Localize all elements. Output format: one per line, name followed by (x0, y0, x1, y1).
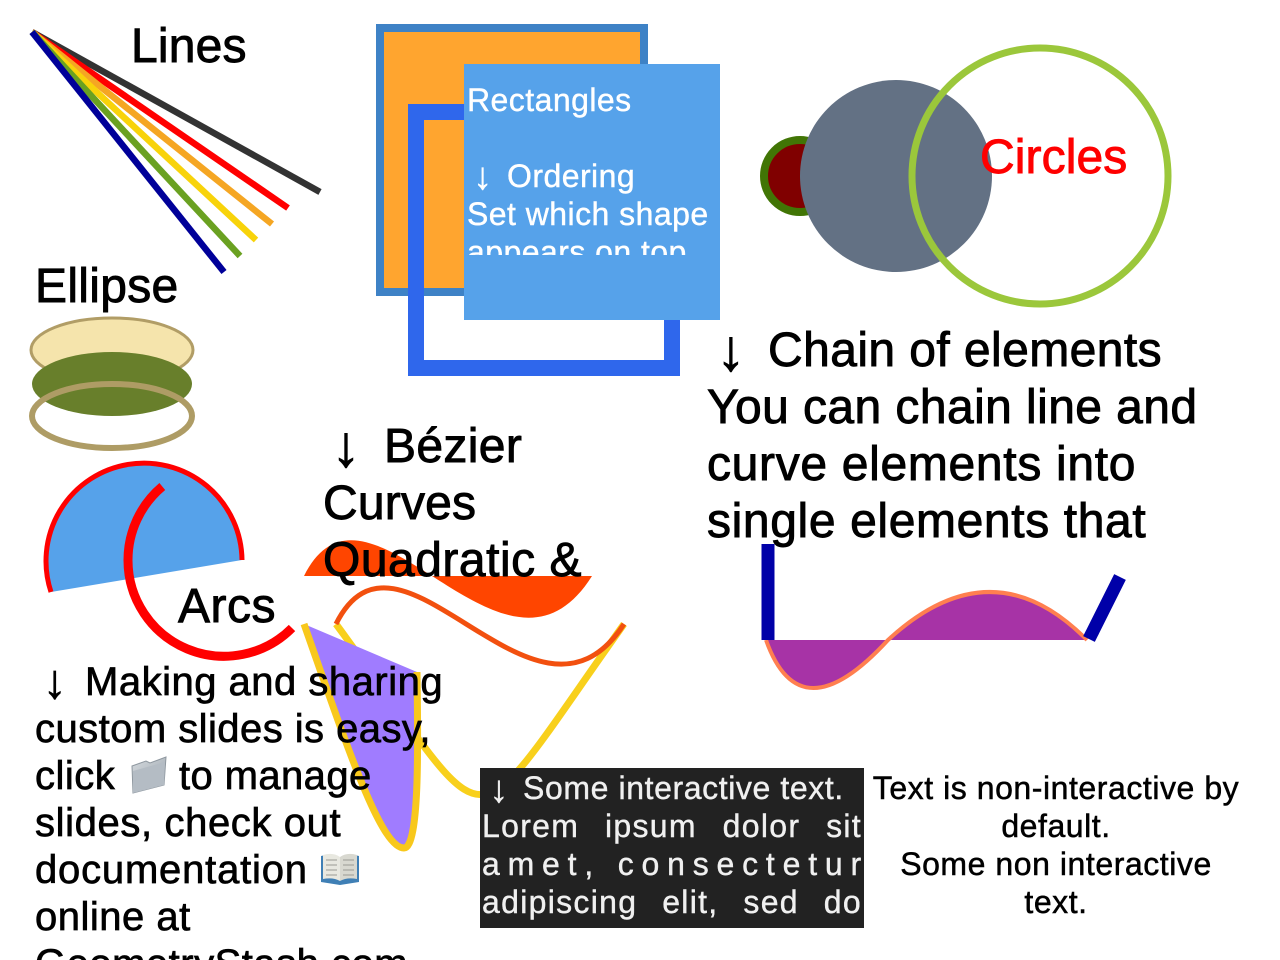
panel: chain of elements path (766, 544, 1120, 688)
text block: rectangles ordering: Ordering (507, 158, 635, 194)
text block: chain of elements: ↓ (716, 318, 746, 383)
panel: interactive text box: amet, consectetur (482, 846, 869, 882)
panel: ellipses (31, 318, 193, 448)
text block: bezier curves: Curves (323, 477, 476, 530)
text block: non-interactive text: default. (1001, 808, 1111, 844)
panel: interactive text box: ↓ (490, 769, 508, 811)
text block: making and sharing: to manage (179, 754, 372, 798)
text block: making and sharing (35, 656, 443, 960)
text block: rectangles ordering: Rectangles (467, 82, 632, 118)
text block: chain of elements: curve elements into (707, 438, 1136, 491)
text block: rectangles ordering: ↓ (473, 156, 493, 198)
text block: making and sharing: click (35, 754, 116, 798)
text block: making and sharing: ↓ (43, 656, 67, 709)
panel: lines fan (32, 32, 320, 272)
text block: chain of elements (707, 318, 1198, 548)
panel: interactive text box: Lorem ipsum dolor sit (482, 808, 862, 844)
panel: interactive text box: Some interactive text. (523, 770, 844, 806)
text block: making and sharing: custom slides is easy, (35, 707, 431, 751)
heading: Lines: Lines (131, 20, 247, 73)
text block: bezier curves: Quadratic & (323, 534, 582, 587)
text block: making and sharing: online at (35, 895, 191, 939)
icon: book (321, 854, 359, 885)
panel: rectangles (380, 28, 720, 368)
panel: circles (764, 48, 1168, 304)
icon: folder (132, 757, 166, 793)
text block: rectangles ordering: appears on top (467, 234, 687, 270)
heading: Arcs: Arcs (178, 580, 276, 633)
text block: non-interactive text (873, 770, 1239, 920)
text block: non-interactive text: Text is non-interactive by (873, 770, 1239, 806)
text block: chain of elements: You can chain line and (707, 381, 1198, 434)
text block: rectangles ordering (468, 87, 707, 255)
panel: arcs (46, 463, 292, 656)
text block: rectangles ordering: Set which shape (467, 196, 709, 232)
text block: making and sharing: documentation (35, 848, 308, 892)
text block: chain of elements: single elements that (707, 495, 1146, 548)
text block: making and sharing: slides, check out (35, 801, 341, 845)
heading: Ellipse: Ellipse (35, 260, 178, 313)
text block: chain of elements: Chain of elements (768, 324, 1162, 377)
text block: bezier curves: ↓ (331, 414, 361, 479)
text block: making and sharing: Making and sharing (85, 660, 443, 704)
text block: non-interactive text: text. (1024, 884, 1088, 920)
text block: bezier curves (323, 414, 582, 587)
text block: non-interactive text: Some non interactive (900, 846, 1212, 882)
panel: interactive text box: adipiscing elit, sed do (482, 884, 862, 920)
text block: bezier curves: Bézier (384, 420, 522, 473)
heading: Circles: Circles (980, 131, 1127, 184)
panel: interactive text box (480, 768, 869, 928)
panel: bezier curves (304, 540, 624, 848)
